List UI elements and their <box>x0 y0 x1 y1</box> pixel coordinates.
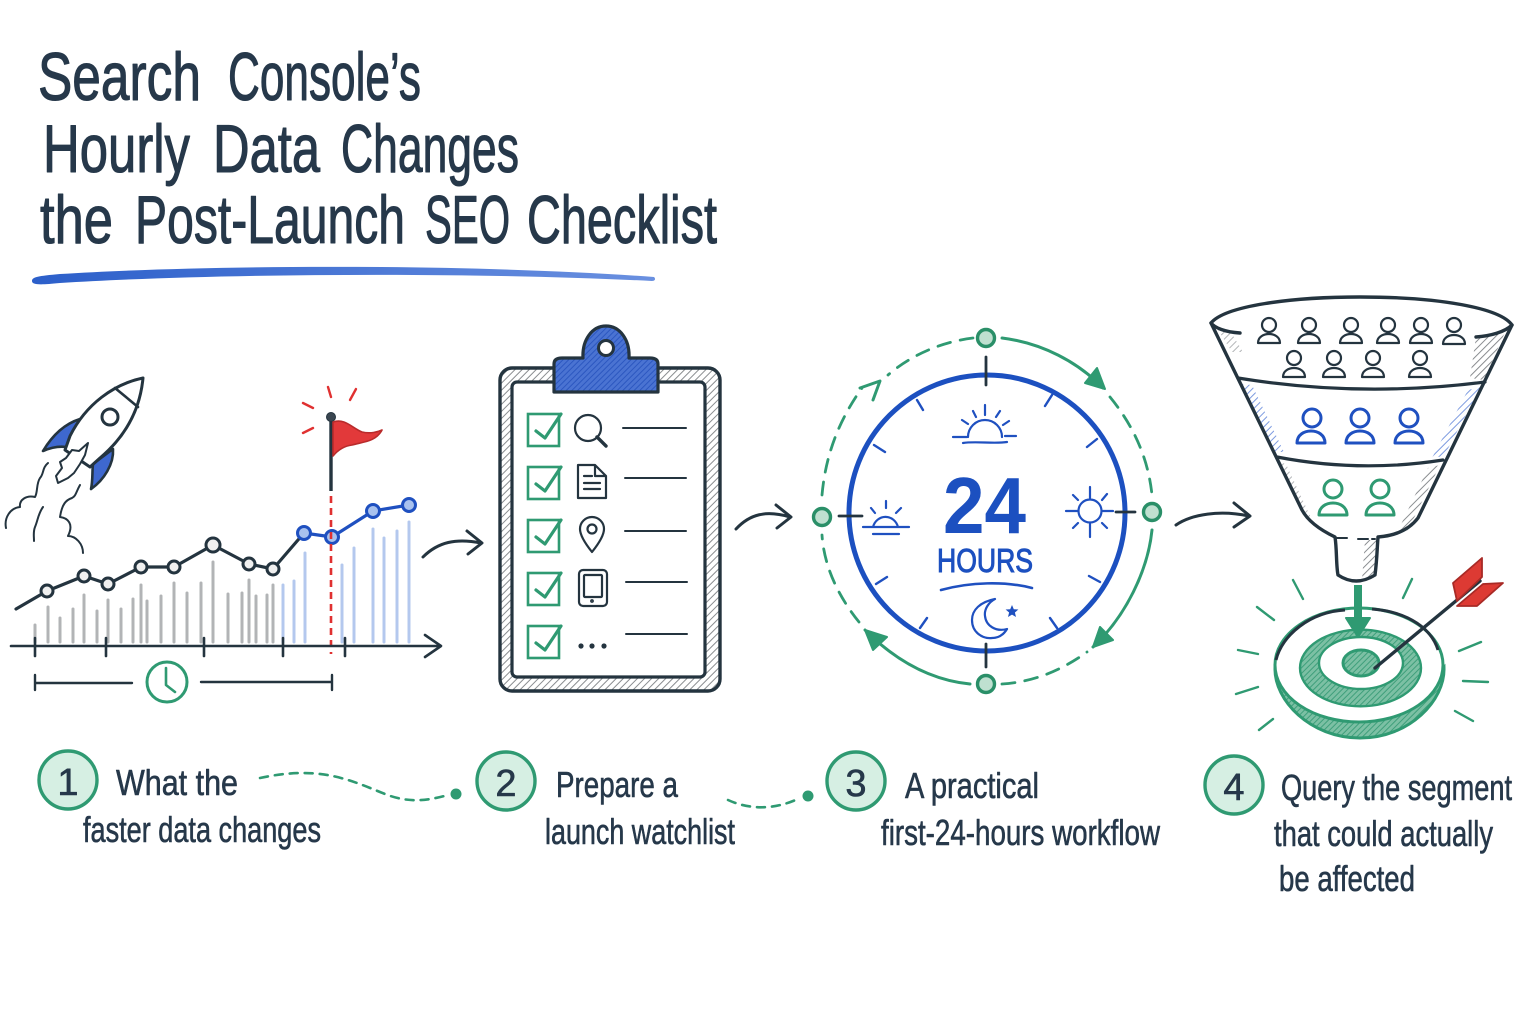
number badge 2: 2 <box>495 763 517 805</box>
bar chart: grey and blue hourly bars <box>35 522 409 642</box>
title: SEO <box>425 182 510 258</box>
icon: document <box>578 465 606 498</box>
number badge 1: 1 <box>57 762 79 804</box>
icon: magnifier <box>575 415 606 446</box>
icon: sun <box>1066 487 1113 537</box>
step 3 label <box>827 752 1161 853</box>
title: Search <box>38 39 201 115</box>
panel: 24-hour clock <box>814 330 1160 692</box>
step 3 label: A practical <box>905 765 1039 806</box>
title: Data <box>213 111 320 187</box>
dotted connector 1 <box>260 773 462 800</box>
title: the <box>40 182 113 258</box>
24 hours label <box>937 461 1033 579</box>
icon: target <box>1275 608 1444 738</box>
blue clock face <box>849 375 1125 651</box>
clipboard clip <box>554 326 658 392</box>
number badge 3: 3 <box>845 763 867 805</box>
green cycle ring <box>814 330 1160 692</box>
step 4 label: be affected <box>1279 858 1415 899</box>
arrow 3 <box>1176 503 1250 527</box>
icon: arrow in target <box>1375 558 1503 668</box>
step 1 label <box>39 751 321 850</box>
icon: map pin <box>580 517 604 552</box>
arrow 1 <box>423 531 482 557</box>
line chart <box>16 498 416 609</box>
number badge 2 <box>477 752 535 810</box>
hours underline <box>941 583 1032 590</box>
people: middle funnel group <box>1297 409 1423 443</box>
icon: moon and star <box>972 599 1018 638</box>
step 2 label: Prepare a <box>556 764 679 805</box>
clock ticks <box>839 357 1135 667</box>
icon: sunset <box>863 501 909 534</box>
icon: rocket <box>6 378 143 553</box>
step 3 label: first-24-hours workflow <box>881 812 1161 853</box>
icon: sunrise <box>953 405 1016 443</box>
panel: funnel and target <box>1211 297 1512 738</box>
icon: clock <box>147 662 187 702</box>
title: Checklist <box>527 182 717 258</box>
number badge 4 <box>1205 756 1263 814</box>
title: Changes <box>341 111 519 187</box>
title: Hourly <box>43 111 190 187</box>
number badge 4: 4 <box>1223 767 1245 809</box>
people: bottom funnel group <box>1319 480 1394 515</box>
icon: dots <box>578 643 607 649</box>
number badge 3 <box>827 752 885 810</box>
funnel body <box>1211 297 1512 581</box>
step 2 label: launch watchlist <box>545 811 735 852</box>
step 2 label <box>477 752 735 852</box>
24 hours label: HOURS <box>937 542 1033 579</box>
panel: clipboard checklist <box>500 326 720 691</box>
title <box>38 39 717 258</box>
dotted connector 2 <box>728 790 814 807</box>
title: Console’s <box>228 39 421 115</box>
icon: red launch flag <box>303 387 382 654</box>
title underline <box>32 267 655 284</box>
icon: tablet <box>579 570 607 606</box>
step 1 label: faster data changes <box>83 809 321 850</box>
24 hours label: 24 <box>943 461 1026 550</box>
time axis <box>11 635 441 690</box>
title: Post-Launch <box>135 182 405 258</box>
arrow into target <box>1346 585 1370 637</box>
step 1 label: What the <box>116 762 238 803</box>
people: top funnel group <box>1258 318 1465 377</box>
step 4 label <box>1205 756 1512 899</box>
arrow 2 <box>736 505 791 529</box>
clipboard board <box>500 368 720 691</box>
checkboxes <box>528 414 561 658</box>
checklist lines <box>623 428 687 634</box>
panel: launch chart <box>6 378 441 702</box>
number badge 1 <box>39 751 97 809</box>
target burst lines <box>1236 579 1488 730</box>
